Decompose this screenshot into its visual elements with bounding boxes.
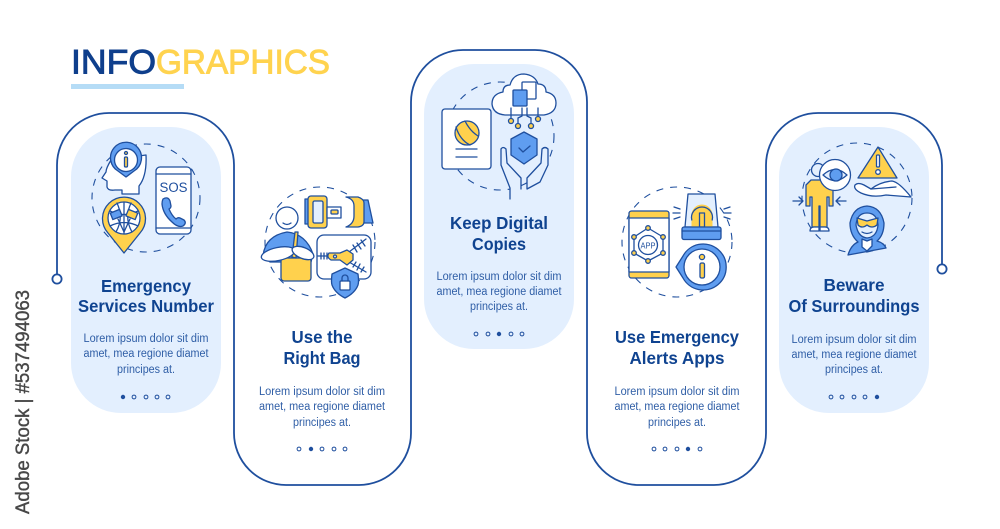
text: Use the Right Bag: principes at.: [293, 417, 351, 429]
icon: shield in hands: [501, 132, 548, 199]
pagination dots 3: [474, 332, 524, 336]
icon: head with info: [102, 142, 146, 194]
text: Use Emergency Alerts Apps: [614, 327, 740, 429]
text: Use Emergency Alerts Apps: principes at.: [648, 417, 706, 429]
text: Use Emergency Alerts Apps: Use Emergency: [615, 327, 739, 347]
text: Keep Digital Copies: amet, mea regione diamet: [436, 286, 562, 298]
text: Emergency Services Number: principes at.: [117, 364, 175, 376]
stock id text: Adobe Stock | #537494063: [13, 290, 34, 514]
text: Use the Right Bag: Right Bag: [284, 348, 360, 368]
icon: person with eye: [793, 160, 850, 231]
icon: lock shield: [332, 268, 358, 298]
title: [71, 44, 330, 82]
icon: map pin: [103, 197, 146, 253]
text: Use the Right Bag: amet, mea regione diamet: [259, 401, 386, 413]
icon: info bubble: [676, 244, 726, 290]
pagination dots 4: [652, 447, 702, 451]
connecting outline: [52, 50, 947, 485]
icon: emergency services: [92, 142, 200, 253]
text: Emergency Services Number: Lorem ipsum dolor sit dim: [84, 333, 208, 345]
text: Use Emergency Alerts Apps: Lorem ipsum dolor sit dim: [614, 386, 740, 398]
icon: app phone: APP: [640, 240, 656, 250]
text: Beware Of Surroundings: principes at.: [825, 364, 883, 376]
icon: zipper: [317, 235, 371, 279]
text: Use Emergency Alerts Apps: Alerts Apps: [630, 348, 725, 368]
icon: warning triangle over hand: [855, 147, 911, 197]
text: Beware Of Surroundings: Lorem ipsum dolor sit dim: [792, 334, 916, 346]
text: Emergency Services Number: Services Number: [78, 296, 214, 316]
icon: hooded thief: [848, 206, 886, 255]
text: Beware Of Surroundings: [788, 275, 920, 376]
text: Beware Of Surroundings: amet, mea regione diamet: [792, 349, 917, 361]
title underline: [71, 84, 184, 89]
text: Emergency Services Number: Emergency: [101, 276, 191, 296]
text: Emergency Services Number: [78, 276, 214, 376]
text: Use the Right Bag: Use the: [292, 327, 353, 347]
text: Keep Digital Copies: [436, 213, 562, 313]
pagination dots 2: [297, 447, 347, 451]
text: Keep Digital Copies: principes at.: [470, 301, 528, 313]
text: Use Emergency Alerts Apps: amet, mea regione diamet: [614, 401, 740, 413]
text: Emergency Services Number: amet, mea regione diamet: [84, 348, 209, 360]
text: Beware Of Surroundings: Beware: [824, 275, 885, 295]
icon: document: [442, 109, 491, 169]
title: GRAPHICS: [156, 44, 330, 82]
title: INFO: [71, 44, 156, 82]
icon: right bag: [260, 187, 375, 298]
text: Use the Right Bag: Lorem ipsum dolor sit dim: [259, 386, 385, 398]
icon: SOS phone: SOS: [160, 180, 188, 195]
pagination dots 5: [829, 395, 879, 399]
icon: siren: [673, 194, 731, 240]
icon: digital copies: [442, 74, 556, 199]
icon: person with bag: [260, 207, 316, 281]
panel: light backgrounds: [71, 64, 929, 413]
text: Use the Right Bag: [259, 327, 386, 429]
text: Keep Digital Copies: Lorem ipsum dolor sit dim: [436, 271, 562, 283]
text: Keep Digital Copies: Copies: [472, 234, 526, 254]
icon: beware of surroundings: [793, 143, 912, 255]
icon: emergency alerts apps: [622, 187, 732, 297]
text: Beware Of Surroundings: Of Surroundings: [788, 296, 920, 316]
icon: cloud: [492, 74, 556, 128]
text: Keep Digital Copies: Keep Digital: [450, 213, 548, 233]
pagination dots 1: [121, 395, 170, 399]
icon: seat belt: [305, 196, 373, 228]
